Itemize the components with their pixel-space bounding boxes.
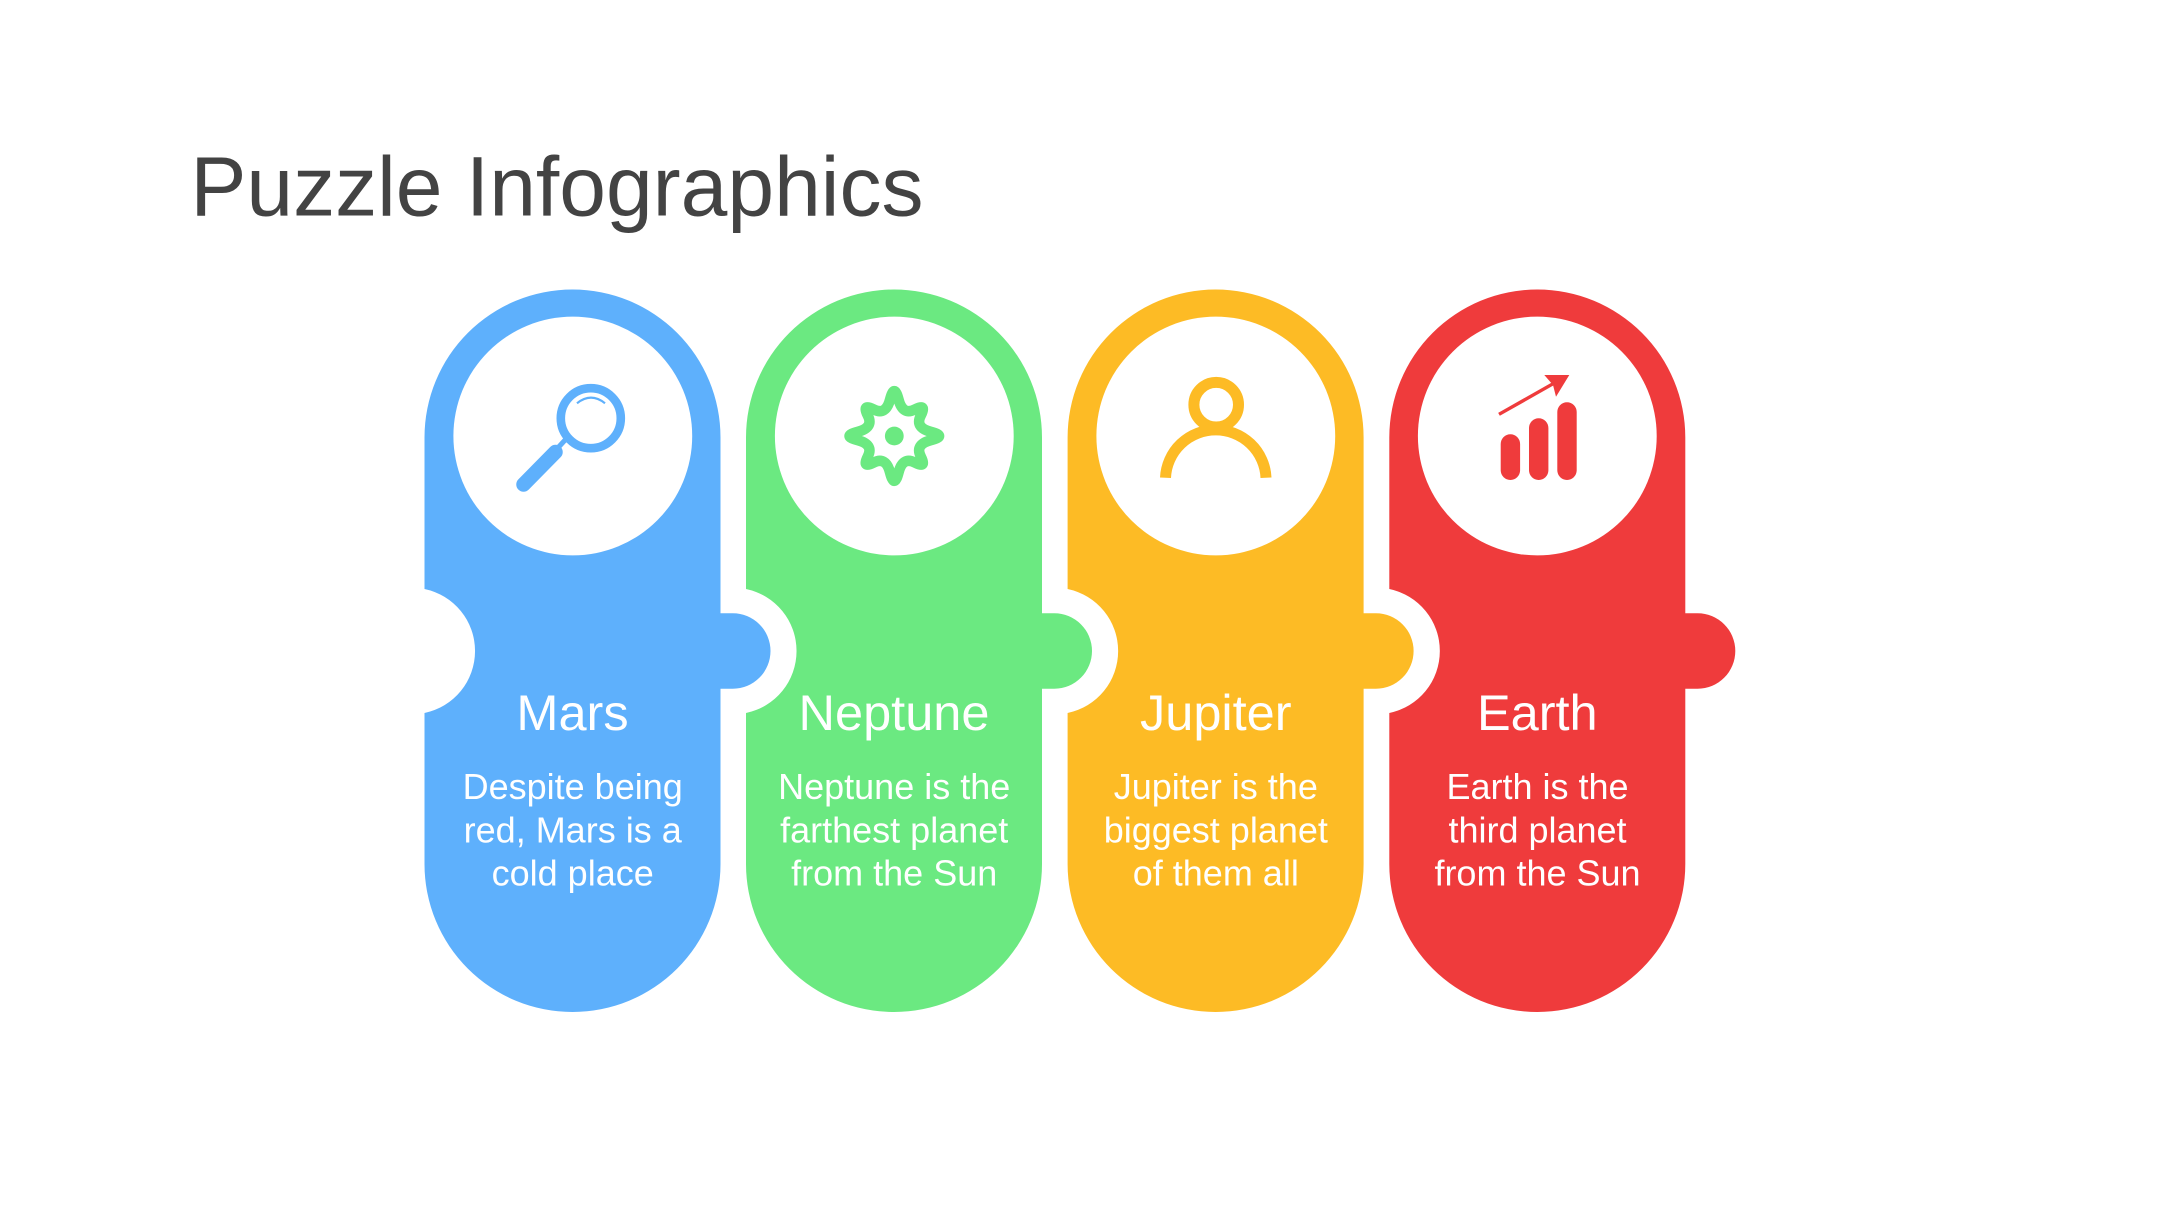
text: Earth description: third planet — [1448, 809, 1627, 850]
puzzle shape: Mars — [424, 290, 771, 1012]
heading: Mars: Mars — [516, 684, 629, 741]
icon: growth chart — [1499, 375, 1577, 480]
icon: person — [1166, 382, 1266, 478]
text: Neptune description: farthest planet — [780, 809, 1008, 850]
title: Puzzle Infographics — [190, 140, 923, 234]
text: Mars description: cold place — [492, 853, 654, 894]
text: Neptune description: from the Sun — [791, 853, 997, 894]
puzzle shape: Jupiter — [1068, 290, 1414, 1012]
text: Earth description: from the Sun — [1434, 853, 1641, 894]
panel: Neptune — [746, 290, 1092, 1012]
text: Mars description: Despite being — [463, 766, 683, 807]
text: Mars description: red, Mars is a — [464, 809, 683, 850]
icon circle: Earth — [1418, 317, 1657, 555]
text: Jupiter description: biggest planet — [1104, 809, 1328, 850]
icon circle: Mars — [453, 317, 692, 555]
panel: Jupiter — [1068, 290, 1414, 1012]
panel: Mars — [424, 290, 771, 1012]
icon circle: Neptune — [775, 317, 1014, 555]
heading: Earth: Earth — [1477, 684, 1598, 741]
text: Neptune description: Neptune is the — [778, 766, 1010, 807]
panel: Earth — [1389, 290, 1735, 1012]
icon: gear — [849, 391, 939, 481]
heading: Jupiter: Jupiter — [1140, 684, 1292, 741]
text: Jupiter description: Jupiter is the — [1114, 766, 1318, 807]
puzzle shape: Earth — [1389, 290, 1735, 1012]
text: Earth description: Earth is the — [1446, 766, 1629, 807]
text: Jupiter description: of them all — [1133, 853, 1299, 894]
icon circle: Jupiter — [1096, 317, 1335, 555]
icon: magnifying glass — [524, 388, 621, 484]
heading: Neptune: Neptune — [799, 684, 989, 741]
puzzle shape: Neptune — [746, 290, 1092, 1012]
